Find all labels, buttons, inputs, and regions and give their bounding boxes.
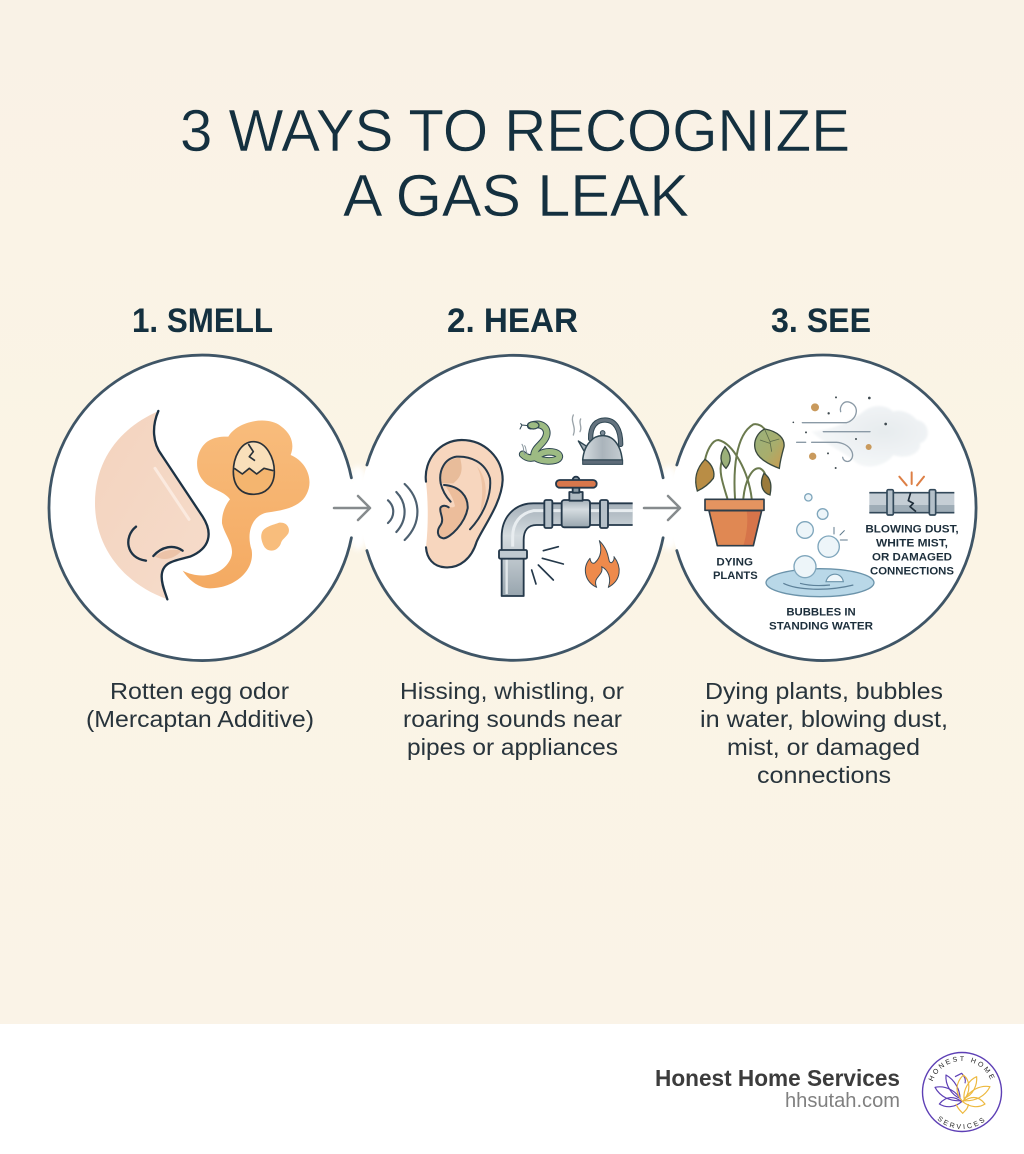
label: dying plants bbox=[713, 556, 758, 582]
title: A GAS LEAK bbox=[343, 163, 689, 229]
footer brand text bbox=[655, 1065, 900, 1112]
caption: hear: pipes or appliances bbox=[407, 734, 618, 760]
title bbox=[180, 98, 850, 229]
label: blowing dust: OR DAMAGED bbox=[872, 551, 952, 563]
icon: gas cloud bbox=[183, 421, 310, 588]
label: bubbles: STANDING WATER bbox=[769, 620, 873, 632]
icon: ear bbox=[426, 440, 503, 567]
step headings bbox=[132, 302, 871, 340]
label: blowing dust: BLOWING DUST, bbox=[865, 524, 959, 536]
footer brand text: Honest Home Services bbox=[655, 1065, 900, 1091]
step headings: 3. SEE bbox=[771, 302, 871, 340]
icon: nose bbox=[95, 411, 209, 599]
label: blowing dust: WHITE MIST, bbox=[876, 537, 948, 549]
icon: dying plant bbox=[696, 424, 784, 546]
circle fills and connectors bbox=[49, 355, 976, 660]
footer band bbox=[0, 1024, 1024, 1154]
arrow: hear to see bbox=[644, 496, 680, 520]
label: bubbles: BUBBLES IN bbox=[786, 606, 856, 618]
icon: kettle bbox=[572, 415, 623, 464]
caption: smell bbox=[86, 678, 314, 732]
caption: hear bbox=[400, 678, 624, 760]
logo: SERVICES bbox=[938, 1116, 984, 1129]
arrow: smell to hear bbox=[334, 496, 370, 520]
title: 3 WAYS TO RECOGNIZE bbox=[180, 98, 850, 164]
icon: leaking pipe with valve bbox=[499, 477, 633, 596]
panel: see illustration bbox=[713, 396, 959, 632]
label: dying plants: DYING bbox=[716, 556, 753, 568]
step headings: 1. SMELL bbox=[132, 302, 273, 340]
icon: flame bbox=[585, 541, 619, 587]
label: blowing dust bbox=[865, 524, 959, 577]
icon: damaged pipe bbox=[869, 472, 954, 515]
caption: hear: roaring sounds near bbox=[403, 706, 622, 732]
icon: snake bbox=[520, 422, 559, 461]
icon: lotus bbox=[935, 1073, 990, 1113]
caption: see: mist, or damaged bbox=[727, 734, 920, 760]
caption: smell: Rotten egg odor bbox=[110, 678, 289, 704]
label: blowing dust: CONNECTIONS bbox=[870, 565, 954, 577]
icon: cracked egg bbox=[233, 442, 274, 494]
circle outlines bbox=[49, 355, 976, 660]
caption: see: connections bbox=[757, 762, 891, 788]
caption: see: Dying plants, bubbles bbox=[705, 678, 943, 704]
caption: smell: (Mercaptan Additive) bbox=[86, 706, 314, 732]
icon: bubbles in puddle bbox=[766, 494, 874, 597]
caption: hear: Hissing, whistling, or bbox=[400, 678, 624, 704]
footer brand text: hhsutah.com bbox=[785, 1090, 900, 1112]
step headings: 2. HEAR bbox=[447, 302, 578, 340]
icon: hiss lines bbox=[532, 547, 563, 584]
panel: hear illustration bbox=[388, 415, 633, 596]
caption: see: in water, blowing dust, bbox=[700, 706, 948, 732]
icon: dust cloud bbox=[792, 396, 928, 469]
label: bubbles bbox=[769, 606, 873, 632]
label: dying plants: PLANTS bbox=[713, 570, 758, 582]
logo bbox=[922, 1052, 1002, 1132]
caption: see bbox=[700, 678, 948, 788]
icon: sound waves bbox=[388, 484, 417, 540]
logo: HONEST HOME bbox=[928, 1056, 995, 1082]
panel: smell illustration bbox=[95, 411, 310, 599]
